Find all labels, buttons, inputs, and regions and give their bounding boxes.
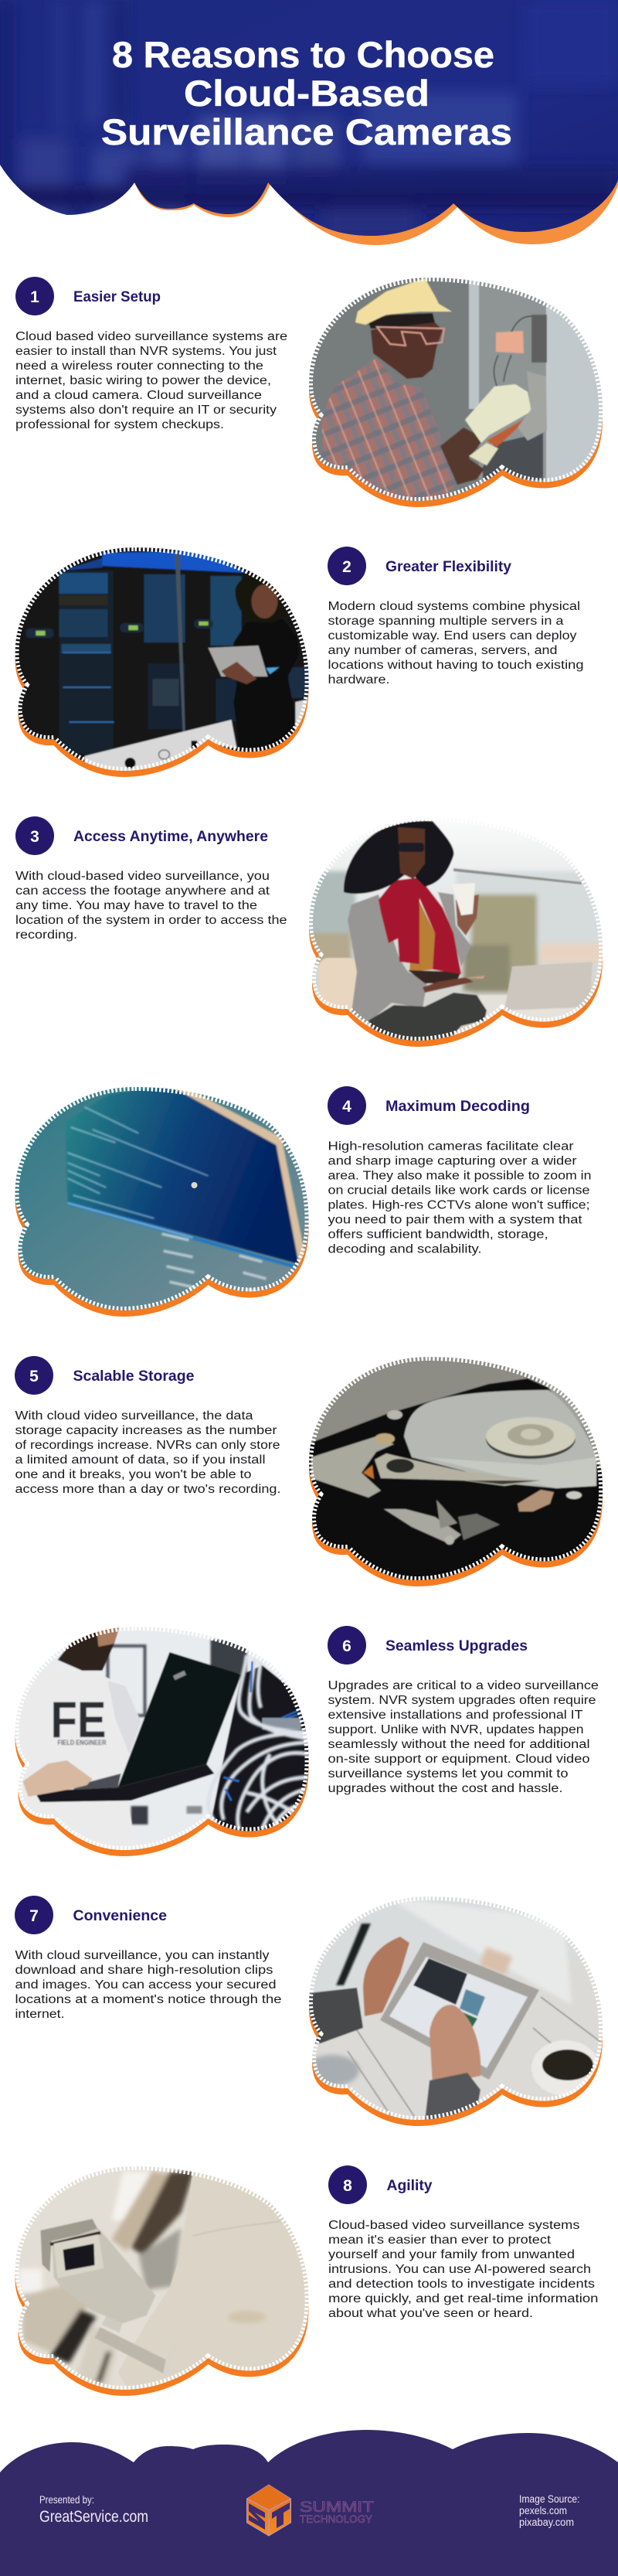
plaid shirt (322, 358, 456, 502)
text block 5: a limited amount of data, so if you install (15, 1453, 266, 1467)
number badge 8 (328, 2165, 367, 2204)
photo: woman with coffee (309, 817, 604, 1047)
text block 6: Upgrades are critical to a video surveillance (328, 1679, 599, 1692)
image source: pixabay.com (519, 2516, 574, 2528)
hand and phone (423, 977, 474, 993)
photo: electrician (309, 278, 604, 507)
heading 8: Agility (386, 2177, 433, 2194)
photo: hard disk drive (309, 1357, 604, 1586)
photo: data center (15, 547, 311, 777)
silver bracket (311, 1436, 394, 1498)
photo: field engineer with laptop: FIELD ENGINEER (57, 1739, 107, 1746)
number badge 4: 4 (342, 1098, 351, 1116)
text block 7 (15, 1949, 281, 2021)
text block 4: High-resolution cameras facilitate clear (328, 1140, 573, 1153)
title: Cloud-Based (184, 73, 430, 114)
text block 5: access more than a day or two's recording. (15, 1483, 281, 1496)
black chassis (309, 1378, 604, 1581)
text block 1 (15, 330, 287, 431)
heading 1: Easier Setup (73, 288, 161, 305)
text block 8: more quickly, and get real-time information (328, 2292, 598, 2305)
shirt print: FE (51, 1691, 107, 1748)
presented by: Presented by: (39, 2493, 94, 2506)
text block 6: upgrades without the cost and hassle. (328, 1782, 562, 1795)
text block 7: and images. You can access your secured (15, 1978, 277, 1992)
text block 4: and sharp image capturing over a wider (328, 1155, 576, 1167)
curly hair (344, 821, 453, 894)
grey cuff (425, 2073, 480, 2121)
number badge 7 (15, 1896, 53, 1934)
text block 3: any time. You may have to travel to the (15, 899, 257, 912)
photo: command line screen (15, 1085, 311, 1317)
logo: summit technology: TECHNOLOGY (300, 2513, 373, 2525)
logo: summit technology: SUMMIT (300, 2499, 374, 2516)
text block 1: professional for system checkups. (15, 418, 224, 431)
red scarf (379, 877, 461, 974)
hand (23, 1760, 93, 1797)
text block 6: surveillance systems let you commit to (328, 1767, 569, 1780)
text block 1: easier to install than NVR systems. You just (15, 345, 277, 358)
camera body (53, 2228, 156, 2323)
panel: reason 1 easier setup (15, 277, 604, 507)
glass pole (175, 554, 185, 750)
number badge 7: 7 (29, 1907, 39, 1925)
rack 2 (144, 574, 185, 642)
header orange shadow (134, 180, 618, 245)
text block 6: system. NVR system upgrades often require (328, 1694, 596, 1707)
number badge 5 (15, 1356, 53, 1395)
wall (117, 2166, 311, 2390)
coffee (531, 2040, 599, 2096)
image source: Image Source: (519, 2493, 579, 2505)
forearm (440, 428, 484, 485)
heading 6: Seamless Upgrades (385, 1637, 528, 1654)
number badge 3: 3 (30, 828, 39, 846)
panel: reason 6 seamless upgrades (15, 1626, 599, 1856)
platter (404, 1390, 596, 1488)
dark cabinet (209, 1665, 311, 1835)
electrical box (531, 315, 547, 363)
text block 3 (15, 870, 287, 942)
panel: reason 8 agility (15, 2165, 598, 2396)
number badge 8: 8 (343, 2177, 352, 2195)
text block 1: need a wireless router connecting to the (15, 359, 263, 373)
blurred background stripes (19, 2170, 195, 2387)
glasses (377, 327, 444, 346)
image source (519, 2493, 579, 2528)
text block 8 (328, 2219, 598, 2320)
title (101, 34, 512, 152)
photo edge ticks (309, 278, 603, 501)
text block 4: decoding and scalability. (328, 1243, 482, 1256)
front hand (430, 2005, 480, 2086)
text block 3: recording. (15, 929, 77, 942)
panel: reason 4 maximum decoding (15, 1085, 592, 1317)
text block 2 (328, 600, 584, 687)
cables (209, 1655, 309, 1829)
text block 7: internet. (15, 2008, 65, 2021)
number badge 1: 1 (30, 288, 39, 306)
text block 5 (15, 1409, 281, 1496)
laptop (117, 1652, 241, 1787)
heading 4: Maximum Decoding (385, 1098, 530, 1115)
glove (465, 384, 531, 443)
number badge 2: 2 (342, 558, 351, 576)
actuator arm (375, 1453, 541, 1486)
tablet (380, 1942, 539, 2080)
photo: field engineer with laptop (15, 1627, 311, 1856)
text block 6 (328, 1679, 599, 1795)
text block 4: on crucial details like work cards or license (328, 1184, 590, 1197)
footer cloud background (0, 2430, 618, 2576)
text block 3: can access the footage anywhere and at (15, 884, 270, 898)
heading 7: Convenience (73, 1907, 167, 1924)
text block 4: you need to pair them with a system that (328, 1214, 582, 1226)
text block 6: support. Unlike with NVR, updates happen (328, 1723, 584, 1736)
laptop (504, 962, 593, 1010)
logo: summit technology (247, 2485, 374, 2536)
text block 2: storage spanning multiple servers in a (328, 615, 564, 628)
number badge 5: 5 (29, 1368, 39, 1385)
text block 5: of recordings increase. NVRs can only store (15, 1439, 280, 1452)
panel: reason 7 convenience (15, 1896, 604, 2126)
rack 1 (59, 571, 113, 754)
text block 6: extensive installations and professional IT (328, 1709, 583, 1722)
text block 8: and detection tools to investigate incidents (328, 2278, 595, 2291)
text block 2: any number of cameras, servers, and (328, 644, 558, 657)
woman (232, 619, 298, 750)
text block 4: area. They also make it possible to zoom in (328, 1169, 592, 1183)
text block 1: internet, basic wiring to power the device, (15, 374, 271, 387)
camera hood (40, 2219, 99, 2272)
text block 1: and a cloud camera. Cloud surveillance (15, 389, 262, 402)
panel: reason 2 greater flexibility (15, 547, 584, 777)
header banner (0, 0, 618, 255)
sweater (407, 897, 435, 972)
display panels (26, 629, 54, 638)
heading 5: Scalable Storage (73, 1368, 195, 1385)
text block 2: locations without having to touch existing (328, 659, 584, 672)
spindle (486, 1419, 576, 1459)
text block 2: hardware. (328, 673, 389, 687)
text block 8: Cloud-based video surveillance systems (328, 2219, 580, 2232)
number badge 4 (328, 1086, 366, 1125)
back hand (363, 1937, 409, 2016)
panel: reason 3 access anytime anywhere (15, 816, 604, 1047)
image source: pexels.com (519, 2505, 567, 2516)
text block 4 (328, 1140, 592, 1256)
face (371, 322, 443, 379)
grey coat (348, 894, 427, 1024)
text block 5: With cloud video surveillance, the data (15, 1409, 253, 1423)
number badge 1 (15, 277, 54, 315)
hand with coffee cup (456, 894, 479, 935)
text block 6: seamlessly without the need for additional (328, 1738, 590, 1751)
dark trousers (368, 993, 487, 1041)
text block 5: storage capacity increases as the number (15, 1424, 277, 1437)
sleeve (438, 892, 471, 966)
lens (63, 2244, 94, 2271)
text block 7: With cloud surveillance, you can instantly (15, 1949, 270, 1962)
left sleeve (309, 1988, 363, 2043)
text block 7: download and share high-resolution clips (15, 1964, 273, 1977)
text block 8: yourself and your family from unwanted (328, 2248, 575, 2261)
screen frame (173, 1089, 305, 1266)
blurred terminal lines (68, 1107, 209, 1238)
text block 2: Modern cloud systems combine physical (328, 600, 580, 613)
presented by: GreatService.com (39, 2508, 148, 2526)
text block 7: locations at a moment's notice through the (15, 1993, 281, 2006)
table planks (309, 1951, 603, 2121)
heading 3: Access Anytime, Anywhere (73, 828, 268, 845)
text block 8: mean it's easier than ever to protect (328, 2234, 552, 2247)
head and beard (57, 1629, 117, 1671)
header photo background (0, 0, 618, 255)
panel: reason 5 scalable storage (15, 1356, 604, 1586)
text block 2: customizable way. End users can deploy (328, 629, 577, 642)
text block 1: Cloud based video surveillance systems are (15, 330, 287, 343)
camera mount (94, 2327, 165, 2373)
silver lower plate (384, 1509, 461, 1544)
title: 8 Reasons to Choose (112, 34, 494, 75)
rack 3 (210, 576, 241, 646)
text block 5: one and it breaks, you won't be able to (15, 1468, 252, 1481)
heading 2: Greater Flexibility (385, 558, 511, 575)
footer (0, 2430, 618, 2576)
text block 8: intrusions. You can use AI-powered search (328, 2263, 591, 2276)
number badge 6: 6 (342, 1637, 351, 1655)
text block 8: about what you've seen or heard. (328, 2307, 533, 2320)
laptop (209, 646, 267, 676)
photo: security camera (15, 2166, 311, 2396)
title: Surveillance Cameras (101, 111, 512, 152)
text block 3: With cloud-based video surveillance, you (15, 870, 270, 883)
number badge 6 (328, 1626, 366, 1665)
text block 4: plates. High-res CCTVs alone won't suffice; (328, 1198, 590, 1212)
text block 4: offers sufficient bandwidth, storage, (328, 1228, 548, 1242)
text block 6: on-site support or equipment. Cloud video (328, 1753, 590, 1766)
white base strip (85, 720, 236, 772)
number badge 2 (328, 547, 366, 585)
hard hat (355, 278, 452, 325)
text block 1: systems also don't require an IT or security (15, 404, 277, 417)
presented by (39, 2493, 148, 2526)
brown clip (518, 1490, 554, 1511)
shirt (15, 1665, 141, 1851)
text block 3: location of the system in order to access the (15, 914, 287, 927)
photo: tablet on table (305, 1896, 604, 2126)
number badge 3 (15, 816, 54, 855)
